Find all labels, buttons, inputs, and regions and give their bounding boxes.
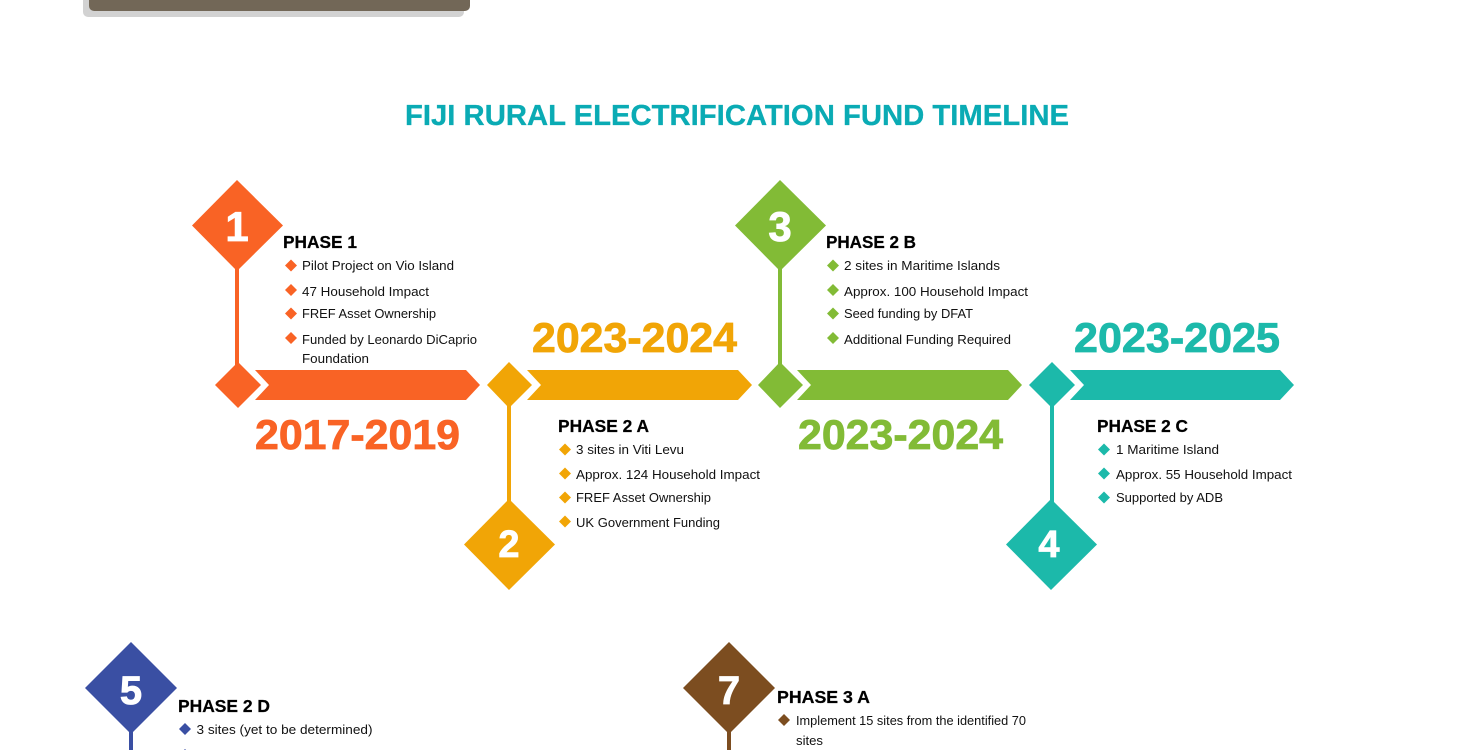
arrow bar 4 xyxy=(1070,370,1294,400)
icon: number diamond 5 xyxy=(85,642,177,734)
year label 2023-2025: 2023-2025 xyxy=(1074,314,1280,361)
phase 2 D: blue xyxy=(85,642,372,750)
phase 2 C bullets: 1 Maritime Island xyxy=(1116,442,1219,457)
phase 2 D heading: PHASE 2 D xyxy=(178,696,270,716)
phase 3 A bullets xyxy=(778,713,1026,748)
phase 1: orange xyxy=(192,180,480,458)
phase 1 heading: PHASE 1 xyxy=(283,232,357,252)
year label 2017-2019: 2017-2019 xyxy=(255,411,460,458)
phase 2 C: teal xyxy=(1006,314,1294,590)
phase 1 bullets: Pilot Project on Vio Island xyxy=(302,258,454,273)
phase 3 A: brown xyxy=(683,642,1026,750)
year label 2023-2024: 2023-2024 xyxy=(532,314,738,361)
year label 2023-2024 green: 2023-2024 xyxy=(798,411,1004,458)
timeline node 1 xyxy=(215,362,261,408)
icon: number diamond 2: 2 xyxy=(498,524,520,566)
title: FIJI RURAL ELECTRIFICATION FUND TIMELINE xyxy=(405,100,1069,132)
arrow bar 3 xyxy=(797,370,1022,400)
connector line 1 xyxy=(235,268,239,366)
phase 2 C bullets: Supported by ADB xyxy=(1116,490,1223,505)
top banner remnant xyxy=(83,0,470,17)
phase 2 B bullets xyxy=(827,258,1028,347)
connector line 2 xyxy=(507,405,511,502)
phase 2 A: amber xyxy=(464,314,760,590)
connector line 5 xyxy=(129,730,133,750)
icon: number diamond 1 xyxy=(192,180,283,271)
phase 2 B heading: PHASE 2 B xyxy=(826,232,916,252)
arrow bar 2 xyxy=(527,370,752,400)
icon: number diamond 4 xyxy=(1006,499,1097,590)
phase 2 D bullets xyxy=(179,722,372,750)
phase 2 D bullets: 3 sites (yet to be determined) xyxy=(196,722,372,737)
phase 2 B bullets: Approx. 100 Household Impact xyxy=(844,284,1028,299)
phase 1 bullets: 47 Household Impact xyxy=(302,284,429,299)
phase 2 A bullets: Approx. 124 Household Impact xyxy=(576,467,760,482)
icon: number diamond 1: 1 xyxy=(225,203,249,250)
phase 2 A bullets xyxy=(559,442,760,530)
timeline node 3 xyxy=(758,362,803,408)
phase 1 bullets: FREF Asset Ownership xyxy=(302,306,436,321)
phase 3 A bullets: sites xyxy=(796,733,824,748)
phase 1 bullets: Foundation xyxy=(302,351,369,366)
phase 2 A bullets: 3 sites in Viti Levu xyxy=(576,442,684,457)
phase 2 B bullets: Additional Funding Required xyxy=(844,332,1011,347)
phase 2 A bullets: UK Government Funding xyxy=(576,515,720,530)
icon: number diamond 7 xyxy=(683,642,775,734)
phase 3 A heading: PHASE 3 A xyxy=(777,687,870,707)
connector line 7 xyxy=(727,730,731,750)
icon: number diamond 2 xyxy=(464,499,555,590)
phase 2 C bullets: Approx. 55 Household Impact xyxy=(1116,467,1292,482)
phase 1 bullets xyxy=(285,258,477,366)
phase 2 B: green xyxy=(735,180,1028,458)
phase 2 C bullets xyxy=(1098,442,1292,505)
phase 3 A bullets: Implement 15 sites from the identified 70 xyxy=(796,713,1026,728)
icon: number diamond 5: 5 xyxy=(120,669,142,713)
icon: number diamond 3: 3 xyxy=(768,203,792,250)
arrow bar 1 xyxy=(255,370,480,400)
phase 2 A heading: PHASE 2 A xyxy=(558,416,649,436)
icon: number diamond 4: 4 xyxy=(1038,524,1060,566)
phase 2 B bullets: Seed funding by DFAT xyxy=(844,306,973,321)
connector line 4 xyxy=(1050,405,1054,502)
phase 2 B bullets: 2 sites in Maritime Islands xyxy=(844,258,1001,273)
icon: number diamond 3 xyxy=(735,180,826,271)
phase 2 C heading: PHASE 2 C xyxy=(1097,416,1188,436)
timeline node 4 xyxy=(1029,362,1075,408)
icon: number diamond 7: 7 xyxy=(718,669,740,713)
connector line 3 xyxy=(778,268,782,366)
timeline node 2 xyxy=(487,362,532,408)
phase 2 A bullets: FREF Asset Ownership xyxy=(576,490,711,505)
phase 1 bullets: Funded by Leonardo DiCaprio xyxy=(302,332,477,347)
